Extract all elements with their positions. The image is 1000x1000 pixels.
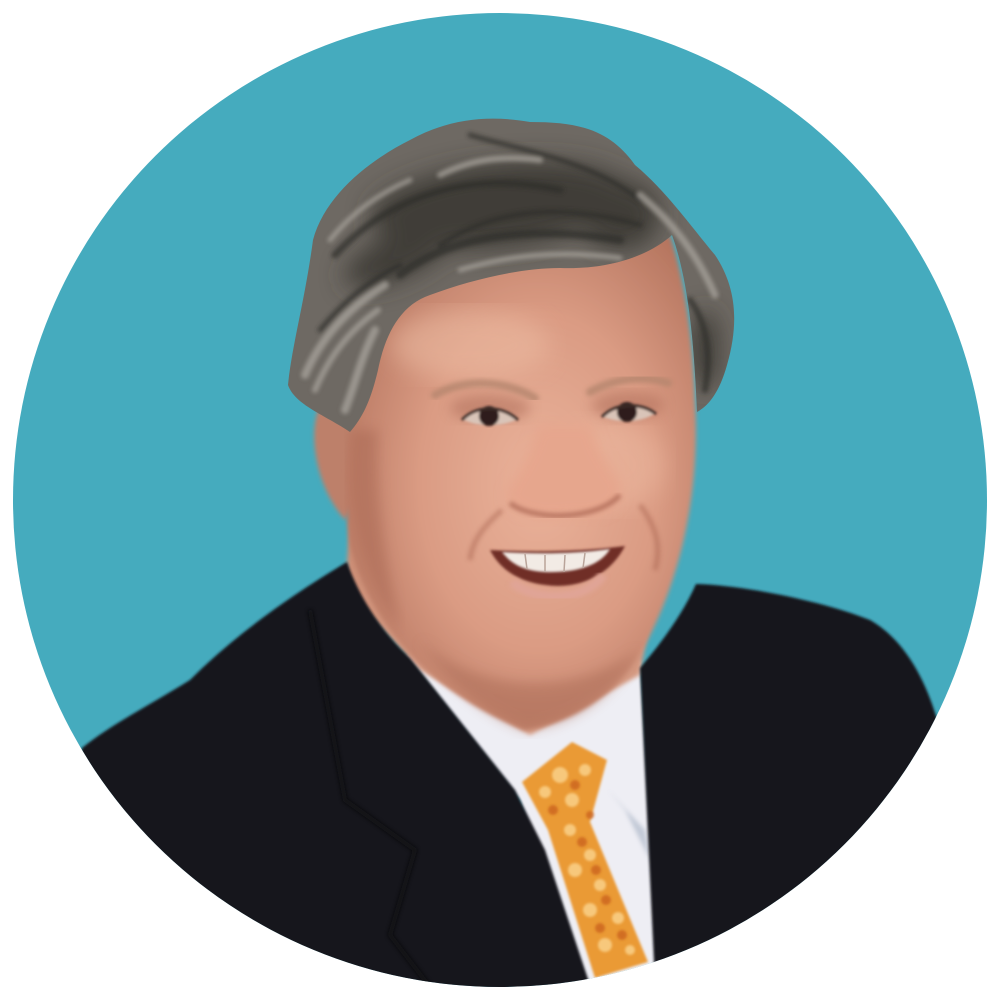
- dark hair mass: [336, 150, 719, 390]
- shirt shadow: [624, 808, 649, 856]
- nose shadow: [510, 495, 620, 516]
- face shadow left: [352, 430, 394, 612]
- mouth: [490, 546, 625, 586]
- chin shadow: [438, 658, 630, 736]
- orange tie: [522, 742, 648, 978]
- neck: [345, 520, 660, 735]
- right eye: [602, 402, 656, 422]
- eye sockets: [450, 391, 664, 422]
- smile lines: [470, 505, 658, 570]
- face: [346, 235, 696, 730]
- left eye: [462, 406, 518, 426]
- cheek highlight: [600, 426, 662, 502]
- lower lip: [512, 575, 603, 596]
- ear: [311, 412, 352, 521]
- tie pattern: [539, 764, 635, 955]
- hair dark strands: [320, 135, 708, 390]
- teeth gaps: [525, 553, 585, 572]
- tie shape: [522, 742, 648, 978]
- teeth: [502, 549, 610, 572]
- nose: [515, 433, 616, 510]
- white shirt: [405, 655, 660, 990]
- lapel shading: [308, 612, 430, 982]
- black suit jacket: [80, 560, 938, 987]
- hair base: [288, 118, 734, 432]
- hair light strands: [305, 158, 715, 410]
- hair: [288, 118, 734, 432]
- eyebrows: [435, 379, 668, 398]
